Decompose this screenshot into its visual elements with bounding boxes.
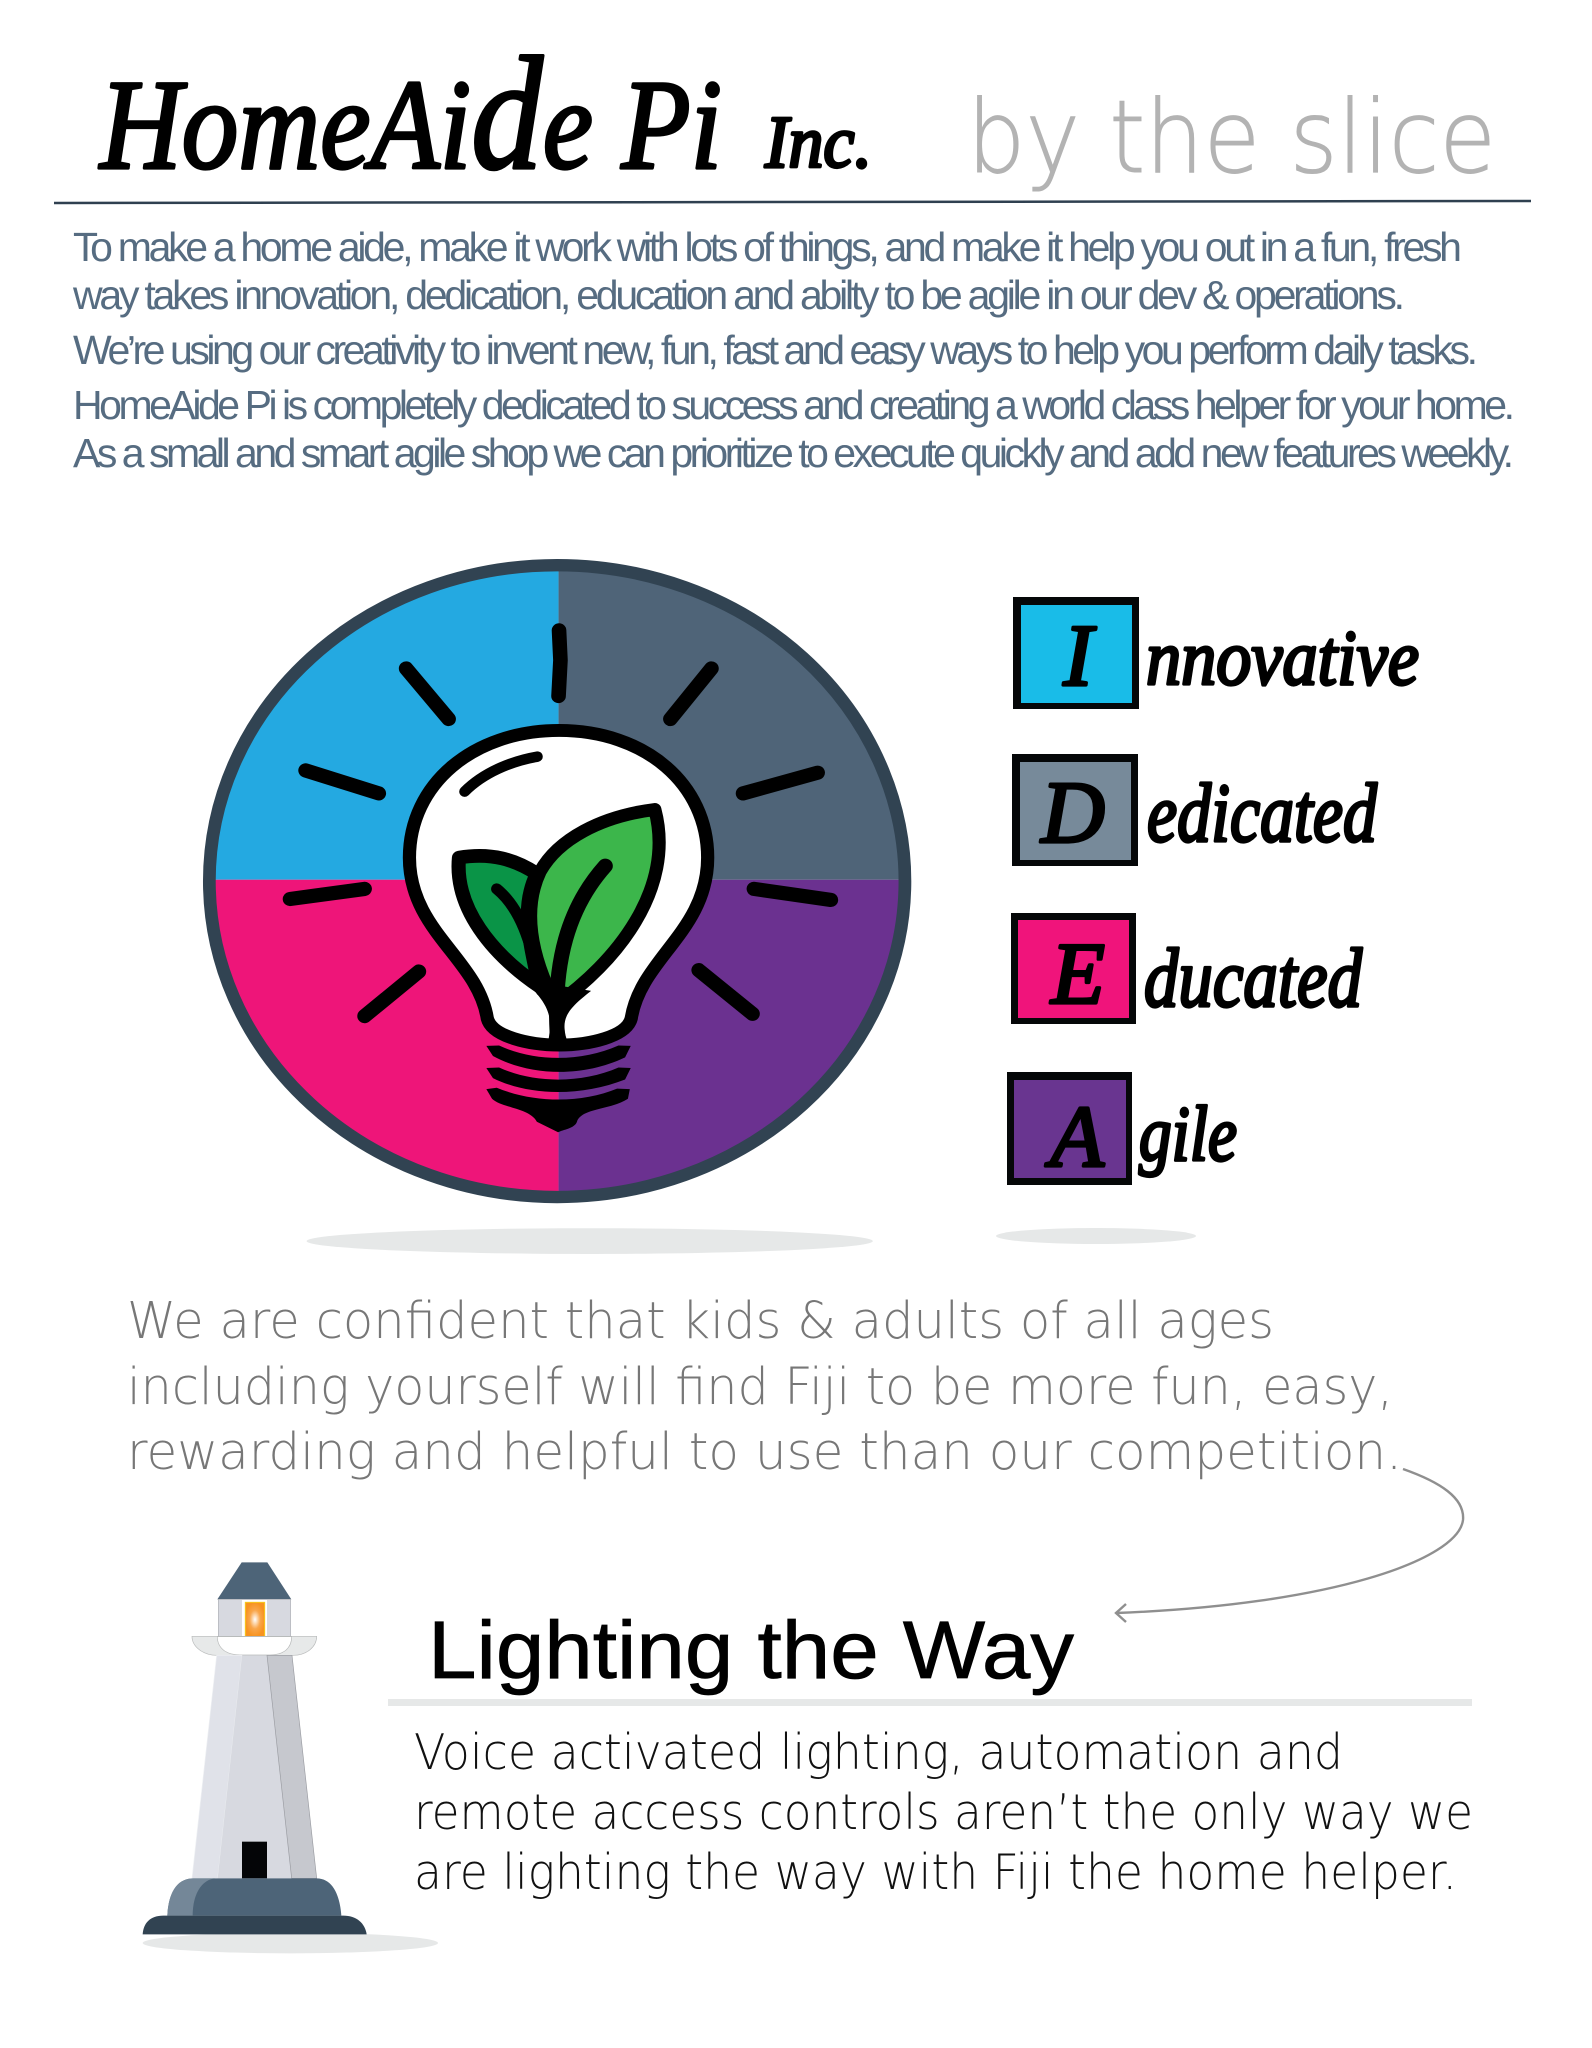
legend shadow [996,1228,1196,1244]
circle shadow [307,1228,873,1254]
legend: I Innovative: I [1062,608,1096,705]
legend: E Educated [1011,913,1363,1025]
lighting description text: Voice activated lighting, automation and [414,1724,1343,1781]
legend: D Dedicated [1012,754,1378,866]
title: HomeAide Pi Inc.: Inc. [764,102,872,184]
icon: lighthouse [143,1562,438,1953]
confidence statement text: including yourself will find Fiji to be more fun, easy, [127,1358,1393,1417]
base [167,1878,341,1916]
legend: I Innovative [1013,597,1419,709]
door [242,1842,267,1878]
heading rule [388,1699,1472,1706]
legend: A Agile: gile [1139,1090,1237,1177]
lighting description text: are lighting the way with Fiji the home helper. [414,1844,1457,1901]
roof [217,1562,291,1599]
arrow: curved from statement to heading [1116,1469,1463,1622]
dark green leaf [459,856,539,986]
confidence statement text [127,1292,1402,1482]
intro text block: To make a home aide, make it work with lots of things, and make it help you out in a fun, fresh [73,224,1462,270]
icon: light bulb with leaves in four-colour circle [190,550,936,1254]
light rays [290,630,831,1016]
plinth [143,1916,367,1934]
confidence statement text: rewarding and helpful to use than our competition. [127,1423,1402,1482]
legend: D Dedicated: edicated [1147,767,1378,860]
intro text block: way takes innovation, dedication, education and abilty to be agile in our dev & operations. [72,272,1405,318]
circle quadrants [216,571,899,1191]
lighthouse shadow [143,1933,438,1953]
legend: I Innovative: nnovative [1146,614,1419,701]
intro text block: HomeAide Pi is completely dedicated to success and creating a world class helper for your home. [73,382,1515,428]
bulb glass [409,730,708,1045]
balcony [192,1636,317,1655]
confidence statement text: We are confident that kids & adults of all ages [127,1292,1274,1351]
title: HomeAide Pi Inc.: HomeAide Pi [98,25,722,204]
intro text block: We’re using our creativity to invent new, fun, fast and easy ways to help you perform daily tasks. [73,327,1478,373]
legend: A Agile [1007,1072,1237,1186]
circle border [209,565,905,1197]
legend: E Educated: E [1049,926,1105,1023]
intro text block [72,224,1515,476]
legend: D Dedicated: D [1040,765,1105,862]
lighting description text [414,1724,1473,1901]
light green leaf [531,809,659,1005]
lamp light [245,1602,265,1637]
lamp room [218,1599,291,1637]
legend: E Educated: ducated [1144,932,1363,1025]
header rule [54,201,1531,203]
bulb highlight [465,757,537,792]
bulb screw base [486,1045,631,1132]
leaf veins and stem [497,866,605,1039]
legend: A Agile: A [1045,1089,1105,1186]
intro text block: As a small and smart agile shop we can prioritize to execute quickly and add new features weekly. [73,430,1514,476]
heading: Lighting the Way: Lighting the Way [428,1605,1074,1696]
subtitle: by the slice: by the slice [967,78,1496,196]
tower [192,1655,317,1878]
lighting description text: remote access controls aren’t the only way we [414,1784,1473,1841]
